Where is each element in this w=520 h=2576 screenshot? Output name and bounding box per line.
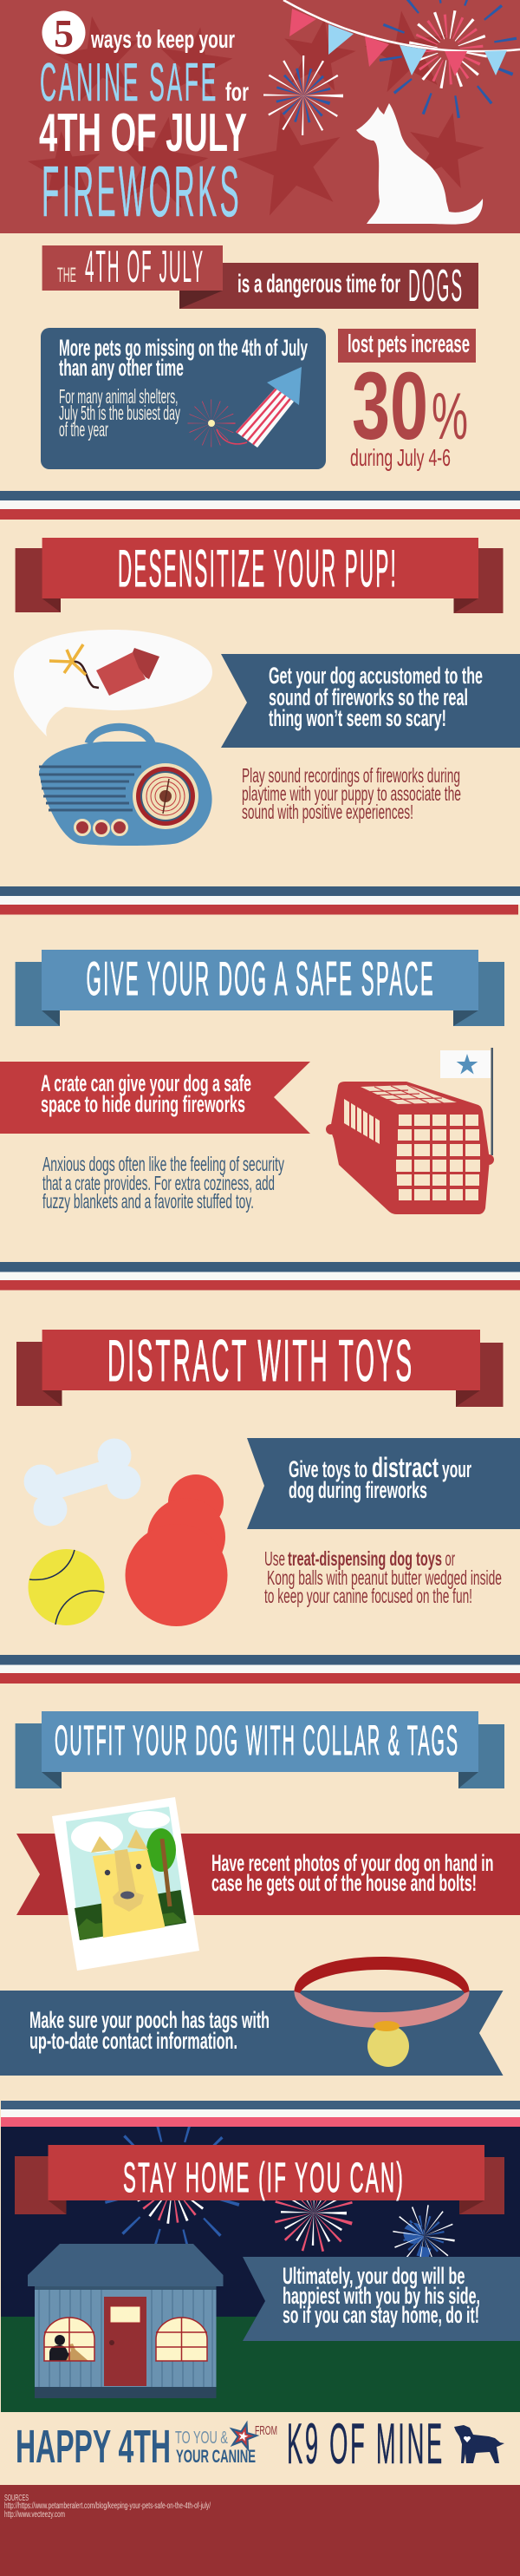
callout: tags with contact information: up-to-date contact information. — [29, 2028, 237, 2054]
heading ribbon: stay home — [15, 2145, 504, 2214]
icon: flag with star — [440, 1048, 493, 1155]
icon: bone — [24, 1438, 140, 1527]
stat: lost pets increase 30%: 30 — [352, 353, 428, 460]
title text block: for — [225, 78, 249, 107]
callout: give toys to distract: distract — [372, 1452, 439, 1483]
ribbon: the 4th of July is a dangerous time for dogs: THE — [57, 264, 76, 287]
sign-off: happy 4th from K9 of Mine: FROM — [255, 2423, 277, 2438]
heading ribbon: give your dog a safe space — [16, 950, 504, 1026]
panel: more pets go missing: July 5th is the busiest day — [59, 402, 180, 424]
callout: give toys to distract: Give toys to — [289, 1456, 367, 1482]
number badge: 5 — [42, 10, 85, 56]
firework: small blue and white burst — [406, 2219, 441, 2253]
icon: radio — [39, 727, 212, 846]
callout: get your dog accustomed — [221, 654, 520, 748]
icon: collar and tag — [294, 1957, 470, 2067]
panel: more pets go missing: than any other time — [59, 355, 184, 381]
icon: dog crate — [326, 1082, 494, 1214]
panel: more pets go missing: of the year — [59, 418, 108, 441]
text: treat dispensing dog toys — [264, 1547, 502, 1607]
callout: give toys to distract: your — [442, 1456, 471, 1482]
bunting flags — [283, 0, 520, 76]
firework: upper right burst — [374, 0, 520, 124]
icon: tennis ball — [28, 1549, 104, 1625]
title text block — [39, 26, 249, 232]
ribbon: the 4th of July is a dangerous time for dogs: 4TH OF JULY — [85, 242, 205, 292]
icon: polaroid photo of dog — [52, 1797, 199, 1971]
callout: a crate can give your dog a safe space: space to hide during fireworks — [41, 1091, 245, 1117]
panel: night scene — [1, 2115, 520, 2412]
striped divider 5 — [0, 2092, 520, 2127]
callout: a crate can give your dog a safe space — [0, 1062, 310, 1134]
text: anxious dogs — [42, 1153, 284, 1213]
callout: give toys to distract: dog during fireworks — [289, 1477, 427, 1503]
text: anxious dogs: Anxious dogs often like the feeling of security — [42, 1153, 284, 1175]
left window with person and dog — [44, 2318, 94, 2361]
striped divider 4 — [0, 1655, 520, 1684]
text: anxious dogs: that a crate provides. For extra coziness, add — [42, 1172, 275, 1194]
callout: a crate can give your dog a safe space: A crate can give your dog a safe — [41, 1070, 251, 1096]
striped divider 2 — [0, 886, 520, 914]
title text block: ways to keep your — [90, 26, 235, 54]
callout: tags with contact information — [0, 1991, 503, 2076]
stat: lost pets increase 30%: during July 4-6 — [350, 444, 451, 471]
icon: white dog silhouette — [356, 103, 483, 225]
number badge: 5: 5 — [54, 11, 74, 56]
firework: pink and white burst — [289, 2188, 338, 2237]
callout: tags with contact information: Make sure your pooch has tags with — [29, 2007, 270, 2033]
icon: house — [28, 2244, 224, 2398]
ribbon: the 4th of July is a dangerous time for dogs — [42, 242, 478, 311]
sign-off: happy 4th from K9 of Mine: HAPPY 4TH — [16, 2421, 171, 2473]
background stars — [25, 5, 490, 219]
panel: more pets go missing: For many animal shelters, — [59, 385, 179, 408]
callout: ultimately your dog — [243, 2257, 520, 2341]
title text block: CANINE SAFE — [40, 53, 218, 113]
footer: sources: SOURCES — [4, 2494, 29, 2503]
ribbon: the 4th of July is a dangerous time for dogs: is a dangerous time for — [237, 270, 400, 298]
sign-off: happy 4th from K9 of Mine — [16, 2411, 504, 2475]
callout: give toys to distract — [247, 1438, 520, 1529]
striped divider 3 — [0, 1262, 520, 1291]
icon: speech bubble with firecracker — [14, 630, 212, 736]
footer: sources: http://www.vecteezy.com — [4, 2510, 65, 2520]
sign-off: happy 4th from K9 of Mine: TO YOU & — [175, 2429, 228, 2448]
icon: dog logo — [454, 2425, 504, 2463]
text: treat dispensing dog toys: Use — [264, 1547, 285, 1570]
hero header panel — [0, 0, 520, 233]
title text block: 4TH OF JULY — [39, 103, 247, 163]
panel: more pets go missing — [41, 328, 326, 469]
striped divider 1 — [0, 491, 520, 520]
right window — [156, 2318, 207, 2361]
footer: sources — [0, 2485, 520, 2576]
heading ribbon: desensitize your pup — [16, 538, 504, 613]
panel: more pets go missing: More pets go missing on the 4th of July — [59, 335, 308, 361]
sign-off: happy 4th from K9 of Mine: YOUR CANINE — [176, 2447, 256, 2467]
door — [104, 2297, 146, 2386]
heading ribbon: outfit your dog — [16, 1711, 504, 1788]
firework: blue and white burst — [102, 2115, 243, 2256]
stat: lost pets increase 30% — [338, 329, 476, 471]
icon: star — [224, 2416, 263, 2454]
footer: sources: http://https://www.petamberalert.com/blog/keeping-your-pets-safe-on-the-4th-of-july/ — [4, 2501, 211, 2511]
firework: white and blue burst — [283, 75, 323, 115]
text: anxious dogs: fuzzy blankets and a favorite stuffed toy. — [42, 1190, 254, 1213]
stat: lost pets increase 30%: % — [432, 380, 468, 454]
icon: red kong toy — [125, 1474, 227, 1626]
text: treat dispensing dog toys: or — [445, 1547, 455, 1570]
callout: recent photos — [16, 1834, 520, 1915]
text: play sound recordings — [242, 764, 461, 823]
icon: rocket — [199, 367, 302, 448]
heading ribbon: distract with toys — [16, 1328, 503, 1407]
